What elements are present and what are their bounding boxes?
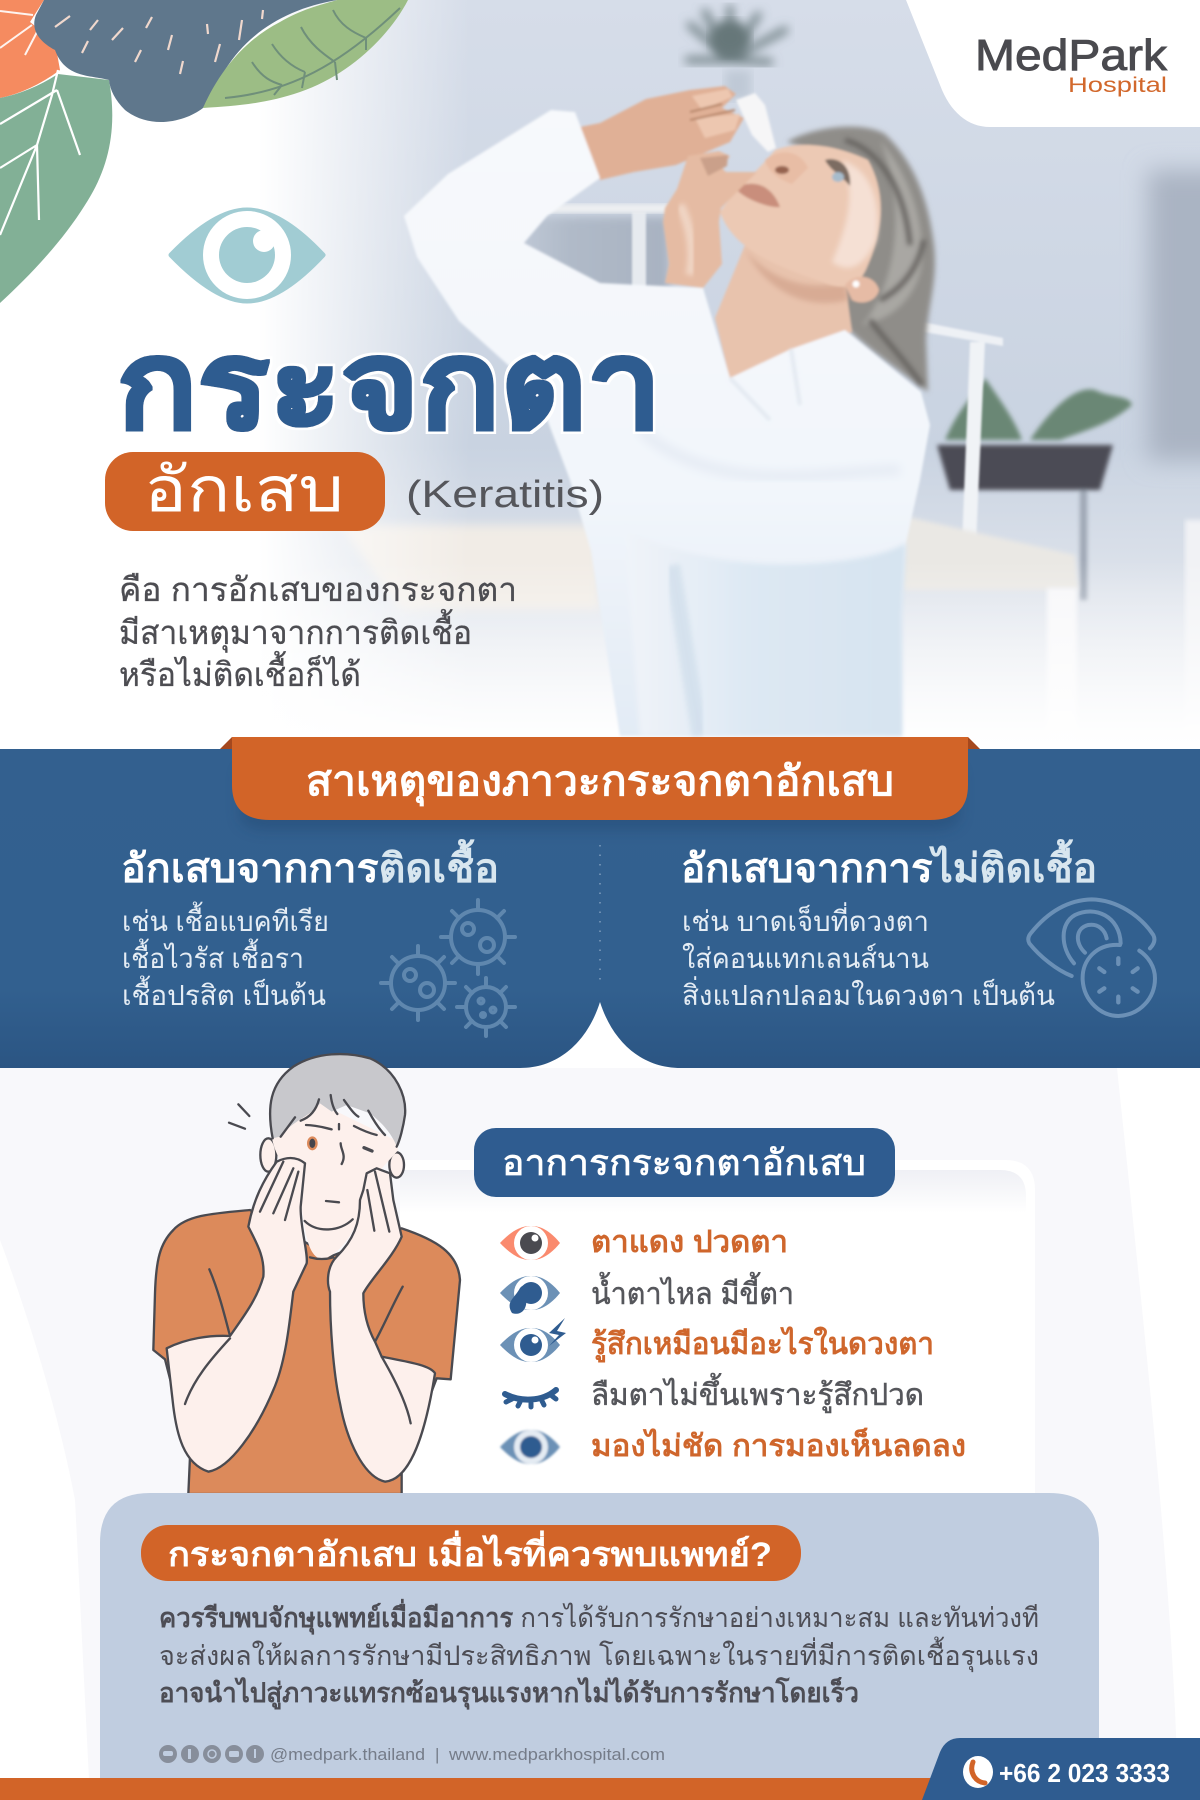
definition text: หรือไม่ติดเชื้อก็ได้ [119, 651, 361, 693]
panel: symptoms card [153, 1054, 1035, 1500]
sparks [229, 1104, 249, 1129]
cause: infectious: อักเสบจากการติดเชื้อ [121, 839, 499, 891]
face lines [305, 1124, 377, 1229]
right ear [389, 1152, 404, 1178]
cause: infectious: เช่น เชื้อแบคทีเรีย [122, 901, 329, 937]
cause: non-infectious [681, 839, 1155, 1016]
symptom 3 [500, 1318, 934, 1363]
panel: when to see a doctor [100, 1493, 1099, 1800]
face [720, 145, 881, 287]
panel: hero photo [0, 0, 1200, 745]
banner folds [220, 737, 980, 749]
definition text [119, 571, 517, 693]
hair back [787, 127, 935, 392]
icon: eye with irritation bolt [500, 1318, 566, 1362]
dropper bottle [736, 93, 776, 152]
light green leaf [203, 0, 408, 108]
hair [270, 1054, 405, 1147]
symptoms heading [474, 1128, 895, 1197]
cause: non-infectious: สิ่งแปลกปลอมในดวงตา เป็นต้น [682, 976, 1055, 1011]
social handle and website: www.medparkhospital.com [448, 1745, 665, 1764]
phone number: +66 2 023 3333 [999, 1758, 1170, 1788]
divider [599, 845, 601, 982]
icon: germs [381, 900, 515, 1036]
cause: infectious: เชื้อปรสิต เป็นต้น [122, 975, 326, 1011]
icon: blurred eye [500, 1430, 560, 1464]
panel: lower background [0, 1068, 1200, 1800]
cause: non-infectious: เช่น บาดเจ็บที่ดวงตา [682, 902, 929, 937]
icon: watery eye [500, 1276, 560, 1314]
icon: red eye [500, 1226, 560, 1260]
teal leaf [0, 70, 112, 303]
doctor paragraph: ควรรีบพบจักษุแพทย์เมื่อมีอาการ การได้รับการรักษาอย่างเหมาะสม และทันท่วงที [159, 1598, 1039, 1635]
symptom 1: ตาแดง ปวดตา [591, 1226, 788, 1259]
title: กระจกตา [117, 317, 662, 455]
symptom 1 [500, 1226, 788, 1260]
upper arm and hand [575, 86, 744, 180]
banner shadow [240, 770, 960, 830]
illustration: worried man [153, 1054, 460, 1494]
right arm and hand [328, 1168, 435, 1482]
logo: MedPark: MedPark [975, 31, 1168, 80]
symptom 2 [500, 1272, 794, 1314]
photo: background room [340, 8, 1200, 740]
cause: infectious: เชื้อไวรัส เชื้อรา [122, 938, 304, 974]
banner: causes heading: สาเหตุของภาวะกระจกตาอักเสบ [306, 758, 894, 807]
icon: closed eye [505, 1390, 556, 1407]
doctor paragraph [159, 1598, 1039, 1710]
symptom 5: มองไม่ชัด การมองเห็นลดลง [591, 1427, 966, 1463]
symptom 2: น้ำตาไหล มีขี้ตา [591, 1272, 794, 1311]
doctor heading pill: กระจกตาอักเสบ เมื่อไรที่ควรพบแพทย์? [168, 1530, 772, 1574]
symptoms heading: อาการกระจกตาอักเสบ [502, 1142, 866, 1183]
panel: causes [0, 737, 1200, 1068]
cause: non-infectious: ใส่คอนแทกเลนส์นาน [682, 942, 929, 974]
icon: eye with contact lens [1028, 899, 1155, 1016]
ear earring [852, 280, 860, 288]
symptom 4 [505, 1373, 924, 1413]
logo panel [906, 0, 1200, 127]
definition text: คือ การอักเสบของกระจกตา [119, 571, 517, 608]
nose lips eye [765, 152, 808, 184]
face [272, 1103, 398, 1259]
phone panel [922, 1738, 1200, 1800]
icon: phone [963, 1756, 993, 1788]
logo: Hospital: Hospital [1068, 74, 1167, 97]
social handle and website [270, 1745, 665, 1764]
social handle and website: @medpark.thailand [270, 1745, 425, 1764]
orange leaf [0, 0, 60, 98]
doctor paragraph: จะส่งผลให้ผลการรักษามีประสิทธิภาพ โดยเฉพาะในรายที่มีการติดเชื้อรุนแรง [159, 1636, 1039, 1673]
left ear [260, 1138, 276, 1172]
definition text: มีสาเหตุมาจากการติดเชื้อ [119, 609, 472, 653]
banner: causes heading [232, 737, 968, 820]
photo: woman applying eye drops [404, 86, 935, 736]
symptom 3: รู้สึกเหมือนมีอะไรในดวงตา [591, 1326, 934, 1363]
subtitle pill [105, 452, 385, 531]
footer bar [0, 1778, 935, 1800]
white shirt [404, 110, 930, 736]
slate leaf [34, 0, 337, 122]
cause: non-infectious: อักเสบจากการไม่ติดเชื้อ [681, 839, 1097, 891]
neck [715, 245, 852, 380]
social icons [159, 1745, 264, 1763]
cause: infectious [121, 839, 515, 1036]
keratitis label: (Keratitis) [406, 474, 604, 516]
icon: eye [171, 210, 323, 301]
doctor heading pill [141, 1525, 801, 1581]
shirt [153, 1210, 460, 1494]
lower hand [663, 151, 757, 288]
left arm and hand [167, 1158, 307, 1472]
symptom 5 [500, 1427, 966, 1464]
sore eye [307, 1136, 318, 1150]
symptom 4: ลืมตาไม่ขึ้นเพราะรู้สึกปวด [591, 1373, 924, 1413]
doctor paragraph: อาจนำไปสู่ภาวะแทรกซ้อนรุนแรงหากไม่ได้รับการรักษาโดยเร็ว [159, 1675, 859, 1710]
leaves decoration [0, 0, 408, 303]
subtitle text: อักเสบ [144, 456, 344, 525]
social handle and website: | [435, 1745, 439, 1764]
